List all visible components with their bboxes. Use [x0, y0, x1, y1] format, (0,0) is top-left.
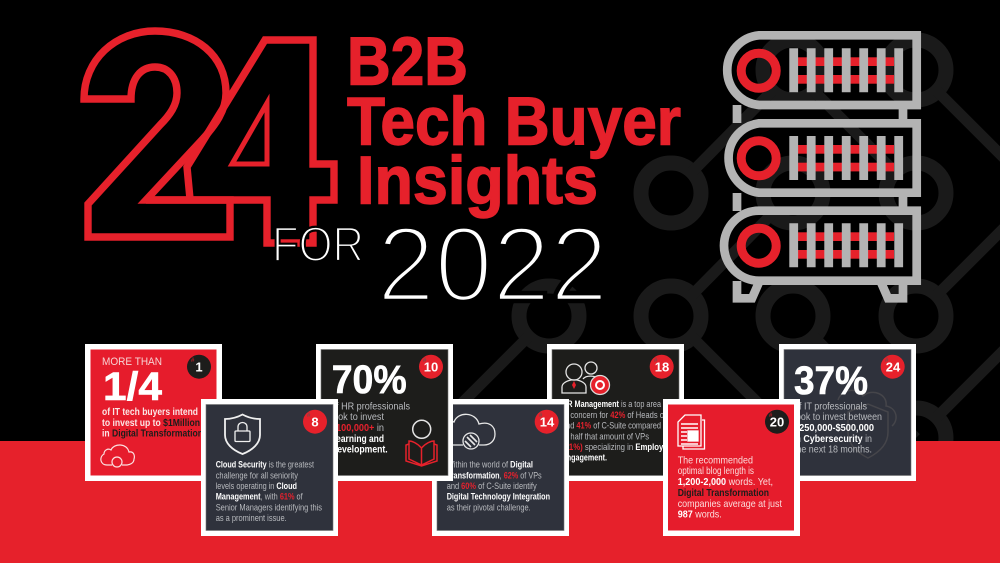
badge: 20 — [765, 410, 789, 434]
text: blog length insight: optimal blog length is — [678, 466, 754, 477]
icon: cloud with globe — [101, 445, 134, 467]
text: digital transformation insight: and 60% of C-Suite identify — [447, 480, 537, 491]
badge: 14: # — [539, 413, 543, 419]
text: cybersecurity insight: the next 18 months. — [794, 445, 872, 456]
icon: cloud with globe — [440, 414, 495, 449]
text: HR management insight: (21%) specializing in Employee — [562, 441, 672, 452]
text: cybersecurity insight: look to invest between — [794, 412, 882, 423]
text: cloud security insight: as a prominent issue. — [216, 512, 287, 523]
icon: faint cloud shield watermark — [838, 390, 896, 458]
text: cybersecurity insight: in Cybersecurity in — [794, 434, 872, 445]
text: digital transformation insight: as their pivotal challenge. — [447, 501, 531, 512]
text: digital transformation investment — [102, 407, 203, 440]
badge: 20: # — [769, 413, 773, 419]
text: digital transformation insight: Transformation, 62% of VPs — [447, 469, 542, 480]
badge: 1: 1 — [195, 360, 203, 374]
text: cybersecurity insight — [794, 401, 882, 456]
text: cloud security insight: levels operating in Cloud — [216, 480, 297, 491]
icon: server rack — [724, 35, 917, 298]
text: cybersecurity insight: $250,000-$500,000 — [794, 423, 874, 434]
badge: 8: # — [307, 413, 311, 419]
panel: insight 1 — [85, 344, 222, 481]
badge: 24: 24 — [886, 360, 901, 374]
text: blog length insight — [678, 455, 782, 521]
icon: document — [678, 415, 704, 449]
badge: 8: 8 — [311, 414, 319, 430]
badge: 1 — [187, 355, 211, 379]
panel: insight 24 — [779, 344, 916, 481]
text: blog length insight: 987 words. — [678, 510, 722, 521]
badge: 10: # — [423, 358, 427, 364]
text: HR management insight: Engagement. — [562, 452, 607, 462]
text: learning and development insight — [331, 401, 410, 456]
icon: managers with gear — [562, 362, 610, 394]
title: FOR 2022 — [272, 204, 608, 324]
title: FOR 2022: 2022 — [377, 204, 608, 324]
text: digital transformation insight: Within the world of Digital — [447, 459, 533, 470]
badge: 24: # — [885, 358, 889, 364]
badge: 1: # — [191, 358, 195, 364]
text: learning and development insight: Development. — [331, 445, 388, 456]
text: cybersecurity insight: of IT professionals — [794, 401, 867, 412]
text: blog length insight: Digital Transformation — [678, 488, 769, 499]
text: more than: MORE THAN — [102, 356, 162, 368]
badge: 18: 18 — [655, 360, 669, 374]
badge: 18 — [650, 355, 674, 379]
text: HR management insight: and 41% of C-Suite compared — [562, 420, 661, 431]
badge: 10: 10 — [424, 360, 438, 374]
text: digital transformation insight — [447, 459, 550, 512]
stat: 70%: 70% — [332, 358, 407, 402]
badge: 24 — [881, 355, 905, 379]
icon: person reading book — [406, 420, 437, 466]
text: learning and development insight: look to invest — [331, 412, 384, 423]
text: cloud security insight: Senior Managers identifying this — [216, 501, 322, 512]
badge: 10 — [419, 355, 443, 379]
panel: insight 18 — [547, 344, 684, 481]
text: HR management insight: of concern for 42% of Heads of — [562, 409, 666, 420]
badge: 14 — [535, 410, 559, 434]
text: digital transformation investment: to invest up to $1Million — [102, 418, 200, 429]
text: learning and development insight: of HR professionals — [331, 401, 410, 412]
text: cloud security insight — [216, 459, 322, 523]
text: cloud security insight: Management, with 61% of — [216, 491, 303, 502]
text: cloud security insight: Cloud Security is the greatest — [216, 459, 314, 470]
title: big outlined 24 — [84, 31, 334, 243]
title: FOR 2022: FOR — [272, 218, 364, 272]
text: learning and development insight: Learning and — [331, 434, 384, 445]
title: B2B Tech Buyer Insights: Tech Buyer — [347, 84, 681, 160]
text: blog length insight: The recommended — [678, 455, 753, 466]
text: HR management insight: to half that amount of VPs — [562, 430, 649, 441]
text: HR management insight — [562, 398, 672, 462]
badge: 18: # — [654, 358, 658, 364]
text: blog length insight: 1,200-2,000 words. Yet, — [678, 477, 773, 488]
stat: 37%: 37% — [794, 359, 868, 403]
text: cloud security insight: challenge for all seniority — [216, 469, 298, 480]
title: B2B Tech Buyer Insights: Insights — [357, 142, 598, 218]
badge: 20: 20 — [770, 414, 784, 430]
panel: insight 14 — [432, 399, 569, 536]
text: digital transformation investment: of IT tech buyers intend — [102, 407, 198, 418]
icon: security shield with lock — [225, 414, 260, 454]
panel: insight 20 — [663, 399, 800, 536]
text: digital transformation insight: Digital Technology Integration — [447, 491, 550, 502]
badge: 14: 14 — [540, 414, 555, 430]
text: blog length insight: companies average at just — [678, 499, 782, 510]
panel: insight 8 — [201, 399, 338, 536]
text: HR management insight: HR Management is a top area — [562, 398, 662, 409]
title: B2B Tech Buyer Insights — [347, 24, 681, 218]
stat: 1/4: 1/4 — [103, 365, 163, 409]
title: B2B Tech Buyer Insights: B2B — [347, 24, 468, 100]
panel: insight 10 — [316, 344, 453, 481]
red bottom band — [0, 441, 1000, 563]
text: digital transformation investment: in Digital Transformation — [102, 429, 203, 440]
text: learning and development insight: $100,000+ in — [331, 423, 384, 434]
badge: 8 — [303, 410, 327, 434]
